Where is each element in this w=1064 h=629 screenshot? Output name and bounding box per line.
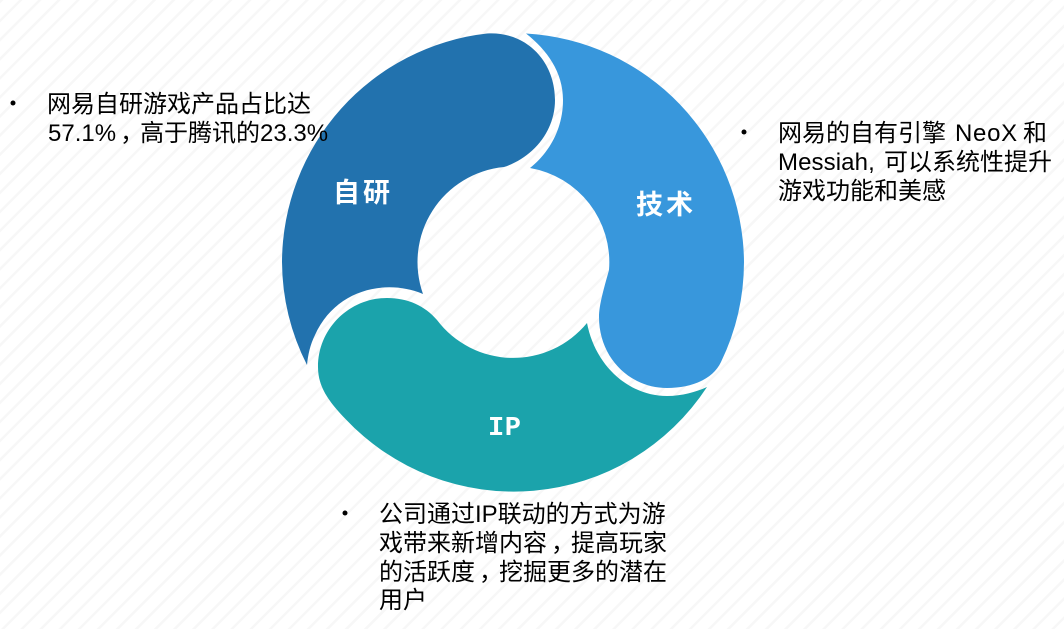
segment: 自研 bbox=[282, 33, 555, 365]
text block: IP description: 用户 bbox=[379, 587, 427, 614]
label: 技术: 技术 bbox=[636, 190, 696, 220]
donut cycle diagram bbox=[282, 33, 744, 492]
segment: 技术 bbox=[526, 34, 744, 388]
text block: IP description: 戏带来新增内容，提高玩家 bbox=[379, 530, 667, 557]
text block: 技术 description: NeoX bbox=[955, 120, 1018, 147]
label: 自研: 自研 bbox=[333, 178, 393, 208]
text block: IP description bbox=[342, 501, 667, 614]
label: IP: IP bbox=[488, 414, 521, 444]
bullet bbox=[742, 130, 746, 134]
text block: 技术 description: 和 bbox=[1023, 120, 1047, 147]
text block: 自研 description bbox=[10, 91, 328, 147]
text block: 技术 description: Messiah, bbox=[778, 149, 875, 176]
bullet bbox=[10, 100, 16, 106]
text block: IP description: 公司通过IP联动的方式为游 bbox=[379, 501, 666, 528]
segment: IP bbox=[318, 298, 707, 492]
text block: 技术 description bbox=[742, 120, 1052, 205]
text block: 技术 description: 游戏功能和美感 bbox=[778, 178, 946, 205]
text block: IP description: 的活跃度，挖掘更多的潜在 bbox=[379, 559, 667, 586]
text block: 自研 description: 57.1%，高于腾讯的23.3% bbox=[48, 120, 328, 147]
text block: 技术 description: 可以系统性提升 bbox=[884, 149, 1052, 176]
bullet bbox=[342, 510, 348, 516]
text block: 自研 description: 网易自研游戏产品占比达 bbox=[47, 91, 311, 118]
text block: 技术 description: 网易的自有引擎 bbox=[778, 120, 946, 147]
